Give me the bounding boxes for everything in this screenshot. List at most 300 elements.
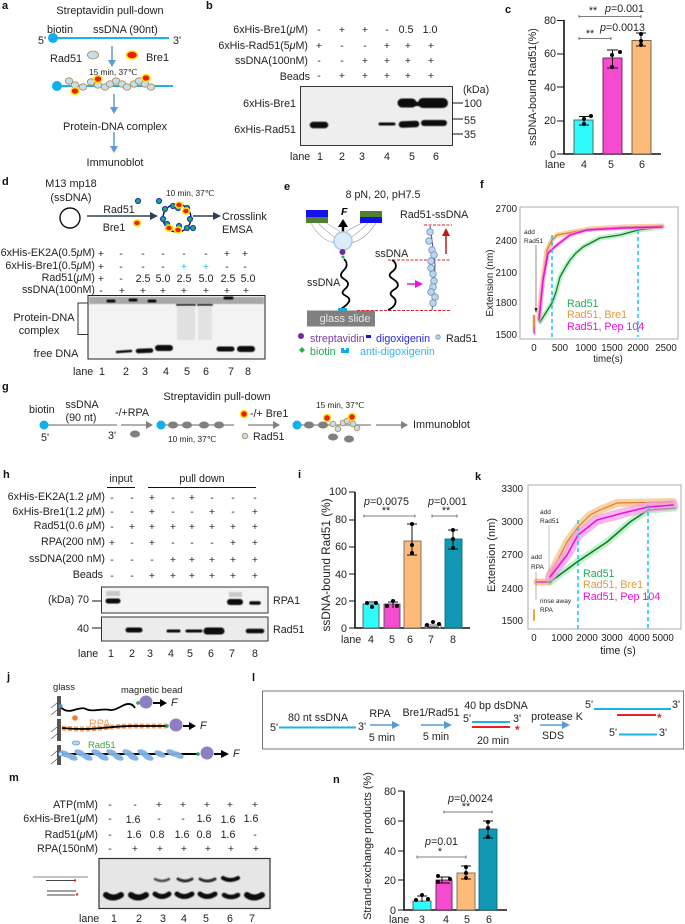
b conditions: +--+++	[316, 40, 434, 52]
l protease step: protease K	[531, 711, 584, 723]
j glass bars	[51, 696, 61, 765]
k axis labels: 2700	[501, 550, 524, 561]
panel l: strand-exchange workflow: l	[252, 672, 255, 684]
i points	[365, 522, 458, 627]
panel h: pull-down blots: h	[3, 469, 10, 481]
l products: 5'	[585, 699, 593, 711]
panel a: pull-down schematic: 3'	[173, 35, 181, 47]
d row labels	[1, 247, 95, 296]
m conditions: 1.6	[244, 813, 258, 825]
l dsDNA: *	[515, 723, 520, 737]
b size markers: (kDa)	[463, 84, 489, 96]
i lanes: 6	[407, 634, 413, 646]
j strand Rad51	[58, 739, 241, 762]
n axes: 20	[384, 875, 396, 887]
panel f: extension time-course chart: f	[480, 179, 484, 191]
j strand Rad51: Rad51	[88, 739, 116, 750]
j strand Rad51: F	[233, 748, 241, 760]
e force arrow	[338, 206, 348, 236]
h blot labels: RPA1	[273, 595, 300, 607]
c axes: 0	[550, 149, 556, 161]
panel d: EMSA	[1, 176, 267, 378]
h blot labels	[48, 594, 305, 636]
k markers: rinse away	[540, 598, 572, 605]
i bars	[363, 539, 462, 628]
b blot image	[300, 86, 452, 146]
d conditions: -+++++++	[99, 285, 249, 297]
k axis labels: time (s)	[600, 645, 636, 657]
b lanes	[290, 151, 439, 163]
h conditions	[109, 492, 258, 582]
f axes labels: Extension (nm)	[485, 249, 496, 317]
h lanes: 7	[229, 648, 235, 660]
e extension states: ssDNA	[375, 248, 409, 260]
panel b: western blot: 6xHis-Rad51	[234, 124, 296, 136]
k curves	[534, 502, 675, 620]
m gel	[99, 858, 270, 908]
c axes	[544, 15, 661, 161]
n significance: p=0.01	[424, 836, 458, 848]
d conditions: 2.5	[136, 273, 150, 285]
panel e: magnetic tweezers schematic	[284, 181, 478, 358]
n lanes	[389, 914, 492, 924]
b lanes: 3	[359, 151, 365, 163]
l Bre1 step: 5 min	[423, 731, 449, 743]
d lanes: 4	[163, 366, 169, 378]
h headers: pull down	[179, 473, 225, 485]
m row labels	[23, 799, 98, 855]
d row labels: 6xHis-EK2A(0.5μM)	[1, 247, 95, 259]
l dsDNA: 40 bp dsDNA	[464, 700, 529, 712]
l products	[585, 699, 680, 739]
b size markers	[452, 84, 489, 141]
l dsDNA	[463, 700, 529, 747]
b conditions: --++++	[317, 55, 434, 67]
e glass slide	[307, 310, 375, 326]
i lanes: 8	[450, 634, 456, 646]
l products: 5'	[609, 727, 617, 739]
panel l: strand-exchange workflow	[252, 672, 684, 749]
panel g: RPA pull-down schematic: g	[2, 381, 9, 393]
f axes labels: 1500	[601, 343, 623, 354]
k markers: add	[540, 509, 551, 516]
b lanes: 4	[384, 151, 390, 163]
l ssDNA	[270, 712, 366, 734]
m lanes	[79, 913, 255, 924]
h row labels: ssDNA(200 nM)	[29, 553, 105, 565]
g step 2: -/+ Bre1	[250, 408, 288, 420]
d gel labels: complex	[19, 325, 60, 337]
g step 2: Rad51	[253, 431, 285, 443]
d schematic: Rad51	[103, 204, 135, 216]
panel j: tether schematic	[6, 671, 241, 765]
f axes labels: 2000	[627, 343, 649, 354]
m conditions: 1.6	[126, 814, 140, 826]
h headers: input	[109, 473, 133, 485]
panel k: extension time-course chart	[475, 471, 681, 657]
panel b: western blot: b	[206, 0, 213, 12]
e legend	[298, 333, 478, 358]
d conditions: 2.5	[177, 273, 191, 285]
k axis labels: 3000	[601, 633, 623, 644]
panel a: pull-down schematic: 15 min, 37℃	[89, 67, 137, 77]
d conditions: 5.0	[199, 273, 213, 285]
d schematic: EMSA	[222, 224, 254, 236]
l Bre1 step: Bre1/Rad51	[402, 707, 460, 719]
d lanes: 6	[203, 366, 209, 378]
e bead and strand	[307, 232, 352, 312]
panel n: bar chart: n	[333, 774, 340, 786]
d lanes: 1	[99, 366, 105, 378]
c axes: 80	[544, 15, 556, 27]
n bars	[413, 829, 497, 910]
m conditions: 1.6	[197, 813, 211, 825]
j labels: glass	[53, 681, 75, 692]
m row labels: Rad51(μM)	[45, 829, 98, 841]
g step 2	[156, 391, 288, 444]
d gel labels: Protein-DNA	[13, 312, 75, 324]
k markers: Rad51	[540, 518, 560, 525]
k markers	[531, 505, 648, 629]
g step 1: 5'	[41, 432, 49, 444]
c significance: **	[589, 5, 597, 17]
e glass slide: glass slide	[320, 313, 370, 325]
f axes labels: 0	[531, 343, 537, 354]
c axes: 40	[544, 82, 556, 94]
e extension states	[357, 209, 469, 310]
b conditions: -+++++	[317, 70, 434, 82]
m conditions: 1.6	[221, 829, 235, 841]
e legend: streptavidin	[310, 333, 365, 345]
k legend: Rad51, Pep 104	[583, 591, 660, 603]
m conditions: 0.8	[150, 829, 164, 841]
panel j: tether schematic: j	[6, 671, 10, 683]
e legend: digoxigenin	[376, 333, 430, 345]
panel c: bar chart	[505, 3, 661, 171]
e bead and strand: ssDNA	[307, 277, 341, 289]
g step 1: biotin	[29, 404, 55, 416]
h conditions: -+++++++	[110, 521, 258, 533]
h conditions: ---+++++	[110, 554, 258, 566]
b size markers: 100	[464, 98, 482, 110]
g step 1: -/+RPA	[115, 407, 150, 419]
b lanes: 1	[317, 151, 323, 163]
l dsDNA: 20 min	[477, 735, 509, 747]
b lanes: 2	[339, 151, 345, 163]
e legend: anti-digoxigenin	[360, 346, 435, 358]
h blot RPA1	[102, 587, 268, 613]
f legend: Rad51, Pep 104	[567, 321, 644, 333]
h blot labels: 40	[77, 623, 89, 635]
j strand RPA: RPA	[89, 718, 111, 730]
l ssDNA: 80 nt ssDNA	[288, 712, 349, 724]
heading a: Streptavidin pull-down	[56, 5, 164, 17]
d conditions: 5.0	[241, 273, 255, 285]
g step 3	[292, 400, 470, 442]
i significance: **	[442, 505, 450, 517]
i y label: ssDNA-bound Rad51 (%)	[319, 498, 333, 632]
h row labels	[8, 491, 105, 581]
b row labels: 6xHis-Bre1(μM)	[233, 24, 308, 36]
panel n: bar chart	[333, 772, 507, 924]
f legend: Rad51, Bre1	[567, 309, 627, 321]
h lanes: 1	[108, 648, 114, 660]
i axes: 100	[329, 486, 347, 498]
l products: *	[657, 711, 662, 725]
h headers	[107, 473, 256, 488]
panel m: strand-exchange gel: m	[9, 772, 19, 784]
g step 1	[29, 399, 153, 444]
b row labels: Beads	[280, 71, 310, 83]
b lanes: 5	[409, 151, 415, 163]
d conditions: ++	[181, 261, 209, 273]
m conditions	[108, 799, 259, 855]
e force arrow: F	[341, 206, 348, 218]
l ssDNA: 5'	[270, 722, 278, 734]
k axis labels: 5000	[652, 633, 674, 644]
panel a: pull-down schematic: a	[2, 0, 9, 12]
b row labels: 6xHis-Rad51(5μM)	[218, 40, 308, 52]
k axis labels: 1500	[501, 616, 524, 627]
h conditions: +-+---++	[109, 537, 258, 549]
c y axis label: ssDNA-bound Rad51(%)	[527, 28, 539, 146]
m conditions: 1.6	[221, 814, 235, 826]
d gel	[88, 296, 265, 359]
l dsDNA: 5'	[463, 713, 471, 725]
f axes labels: 2500	[655, 343, 677, 354]
m conditions: 1.6	[127, 829, 141, 841]
h blot Rad51	[102, 617, 268, 641]
l Bre1 step	[402, 707, 460, 743]
k axis labels: 3300	[501, 484, 524, 495]
k axis labels: 4000	[628, 633, 650, 644]
k markers: RPA	[540, 607, 554, 614]
d schematic: (ssDNA)	[50, 192, 92, 204]
k axis labels: 1000	[551, 633, 573, 644]
l RPA step	[369, 708, 400, 744]
k axis labels: 3000	[501, 517, 524, 528]
n significance: *	[438, 846, 442, 858]
d schematic	[45, 178, 267, 236]
d conditions: +-	[98, 273, 123, 285]
m row labels: 6xHis-Bre1(μM)	[23, 813, 98, 825]
h lanes	[78, 648, 258, 660]
panel a: pull-down schematic: Bre1	[146, 52, 169, 64]
g step 2: 10 min, 37℃	[168, 434, 216, 444]
m conditions: -++++++	[108, 843, 259, 855]
c lanes	[545, 159, 645, 171]
k axis labels: 2400	[501, 584, 524, 595]
panel a: pull-down schematic: Immunoblot	[87, 157, 143, 169]
d schematic: Crosslink	[222, 211, 267, 223]
b row labels: ssDNA(100nM)	[235, 55, 308, 67]
k axis labels: Extension (nm)	[486, 518, 498, 592]
d conditions	[98, 248, 255, 297]
k legend: Rad51	[583, 568, 615, 580]
h row labels: 6xHis-Bre1(1.2 μM)	[12, 506, 105, 518]
k markers: RPA	[531, 564, 545, 571]
d schematic: M13 mp18	[45, 178, 97, 190]
g step 3: 15 min, 37℃	[316, 400, 364, 410]
c axes: 60	[544, 48, 556, 60]
h lanes: 3	[147, 648, 153, 660]
c lanes: 6	[639, 159, 645, 171]
d conditions: +-----	[98, 261, 247, 273]
i axes	[329, 486, 470, 635]
h row labels: 6xHis-EK2A(1.2 μM)	[8, 491, 105, 503]
c significance: p=0.001	[604, 3, 644, 15]
n significance	[417, 793, 493, 858]
c significance: **	[586, 28, 594, 40]
d conditions: 5.0	[156, 273, 170, 285]
i axes: 20	[335, 596, 347, 608]
c lanes: lane	[545, 159, 565, 171]
d lanes: lane	[73, 366, 93, 378]
h lanes: 5	[187, 648, 193, 660]
d lanes: 7	[228, 366, 234, 378]
g step 1: 3'	[108, 430, 116, 442]
c lanes: 5	[608, 159, 614, 171]
i lanes: lane	[341, 634, 361, 646]
n significance: **	[462, 801, 470, 813]
d row labels: Rad51(μM)	[42, 272, 95, 284]
h conditions: --++++++	[110, 570, 258, 582]
h conditions: --+--+-+	[110, 506, 258, 518]
c lanes: 4	[581, 159, 587, 171]
d lanes: 8	[245, 366, 251, 378]
l protease step: SDS	[542, 730, 564, 742]
h row labels: RPA(200 nM)	[41, 536, 105, 548]
panel k: extension time-course chart: k	[475, 471, 482, 483]
f plot frame	[520, 207, 678, 339]
l protease step	[531, 711, 584, 742]
d lanes	[73, 366, 251, 378]
j strand RPA: F	[200, 720, 208, 732]
l products: 3'	[659, 727, 667, 739]
j strand bare: F	[171, 697, 179, 709]
f axes labels: 500	[552, 343, 569, 354]
j labels	[53, 681, 183, 695]
i axes: 60	[335, 541, 347, 553]
g step 2: Streptavidin pull-down	[163, 391, 271, 403]
panel h: pull-down blots	[3, 469, 305, 660]
e title: 8 pN, 20, pH7.5	[346, 189, 420, 201]
b conditions: 0.5	[399, 24, 413, 36]
panel d: EMSA: d	[2, 176, 9, 188]
panel f: extension time-course chart	[480, 179, 678, 365]
f axes labels: 1800	[495, 298, 518, 309]
g step 1: (90 nt)	[66, 412, 96, 424]
i lanes: 4	[368, 634, 374, 646]
d gel labels: free DNA	[34, 348, 79, 360]
panel m: strand-exchange gel	[9, 772, 270, 924]
panel a: pull-down schematic: biotin	[47, 24, 73, 36]
i axes: 0	[341, 623, 347, 635]
d lanes: 5	[184, 366, 190, 378]
b row labels	[218, 24, 310, 83]
i significance: p=0.0075	[363, 496, 409, 508]
l RPA step: RPA	[369, 708, 391, 720]
b lanes: 6	[433, 151, 439, 163]
n significance: p=0.0024	[447, 793, 493, 805]
b lanes: lane	[290, 151, 310, 163]
m band schematic	[33, 877, 88, 896]
panel b: western blot: 6xHis-Bre1	[243, 98, 296, 110]
i axes: 80	[335, 514, 347, 526]
f legend: Rad51	[567, 298, 599, 310]
i significance: p=0.001	[427, 496, 467, 508]
n axes	[384, 786, 507, 917]
d schematic: 10 min, 37℃	[166, 188, 214, 198]
k legend	[583, 568, 660, 603]
j labels: magnetic bead	[121, 684, 183, 695]
n axes: 60	[384, 816, 396, 828]
m conditions: --+++++	[108, 799, 258, 811]
m conditions: ---	[108, 813, 185, 825]
m row labels: ATP(mM)	[53, 799, 98, 811]
c points	[579, 32, 646, 126]
k plot frame	[528, 485, 681, 629]
h lanes: 4	[168, 648, 174, 660]
e legend: Rad51	[446, 333, 478, 345]
h lanes: 2	[129, 648, 135, 660]
h blot labels: Rad51	[273, 624, 305, 636]
f markers	[524, 229, 638, 337]
k markers: add	[531, 554, 542, 561]
panel a: pull-down schematic: Rad51	[50, 53, 82, 65]
d row labels: ssDNA(100nM)	[22, 284, 95, 296]
f markers: Rad51	[524, 238, 544, 245]
f axes labels: 2400	[495, 236, 518, 247]
panel c: bar chart: c	[505, 4, 511, 16]
b conditions: 1.0	[423, 24, 437, 36]
d row labels: 6xHis-Bre1(0.5μM)	[5, 260, 95, 272]
c axes: 20	[544, 115, 556, 127]
h row labels: Rad51(0.6 μM)	[34, 520, 105, 532]
e magnets	[306, 210, 382, 243]
l ssDNA: 3'	[358, 721, 366, 733]
h blot labels: (kDa) 70	[48, 594, 89, 606]
m conditions: 0.8	[197, 829, 211, 841]
f axes labels	[485, 204, 677, 365]
k axis labels: 0	[531, 633, 537, 644]
panel e: magnetic tweezers schematic: e	[284, 181, 290, 193]
panel a: pull-down schematic	[2, 0, 181, 169]
f axes labels: 2100	[495, 268, 518, 279]
panel a: pull-down schematic: 5'	[38, 35, 46, 47]
g step 1: ssDNA	[65, 399, 99, 411]
d lanes: 2	[123, 366, 129, 378]
m row labels: RPA(150nM)	[37, 843, 98, 855]
n y label: Strand-exchange products (%)	[362, 772, 374, 920]
panel i: bar chart	[298, 469, 470, 646]
c significance: p=0.0013	[599, 22, 645, 34]
l dsDNA: 3'	[513, 713, 521, 725]
k legend: Rad51, Bre1	[583, 579, 643, 591]
n points	[414, 820, 493, 902]
panel a: pull-down schematic: Protein-DNA complex	[63, 121, 168, 133]
j strand RPA	[62, 715, 208, 732]
g step 3: Immunoblot	[413, 419, 470, 431]
j strand bare	[58, 696, 179, 711]
m conditions: 1.6	[175, 829, 189, 841]
h lanes: 8	[252, 648, 258, 660]
i significance: **	[382, 505, 390, 517]
e legend: biotin	[310, 346, 336, 358]
i significance	[363, 496, 467, 518]
l frame	[262, 691, 684, 749]
l RPA step: 5 min	[369, 732, 395, 744]
